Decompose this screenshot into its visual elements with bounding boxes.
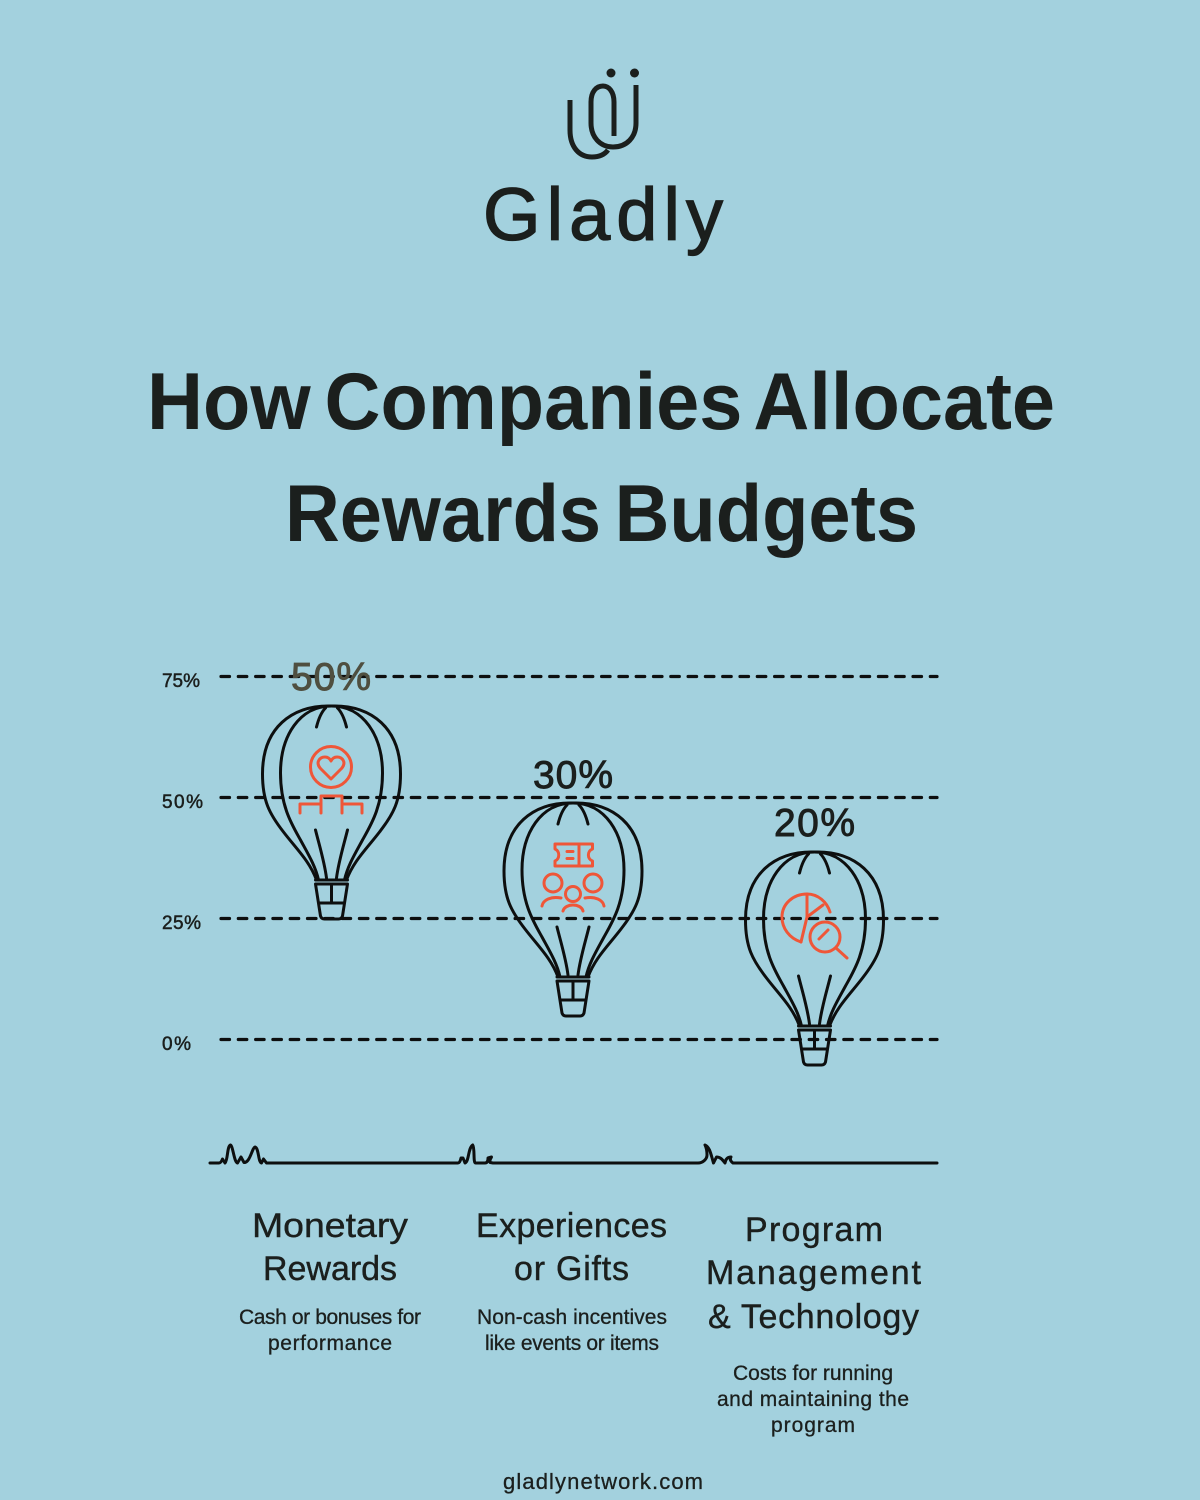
category: monetary rewards: performance xyxy=(268,1332,392,1355)
title: Rewards Budgets xyxy=(285,469,918,559)
category: monetary rewards: Cash or bonuses for xyxy=(239,1306,421,1329)
category: program management and technology: Costs for running xyxy=(733,1362,893,1385)
category: program management and technology xyxy=(706,1211,922,1437)
balloon: experiences or gifts 30% xyxy=(504,754,642,1016)
logo: Gladly xyxy=(483,68,723,256)
wordmark: Gladly xyxy=(483,173,723,256)
chart: balloon chart of budget allocation xyxy=(162,656,937,1065)
icon: pie chart and magnifier xyxy=(782,894,847,958)
footer url: gladlynetwork.com xyxy=(503,1469,703,1494)
title: How Companies Allocate xyxy=(147,357,1055,447)
value label 50%: 50% xyxy=(291,656,371,699)
y axis labels: 50% xyxy=(162,792,203,813)
category: experiences or gifts xyxy=(476,1207,667,1355)
category: program management and technology: Program xyxy=(745,1211,883,1249)
icon: paperclip smile xyxy=(570,68,639,157)
category: experiences or gifts: Non-cash incentives xyxy=(477,1306,667,1329)
category: experiences or gifts: like events or items xyxy=(485,1332,659,1355)
y axis labels xyxy=(162,671,203,1055)
balloon: program management and technology 20% xyxy=(746,802,884,1065)
category: program management and technology: Management xyxy=(706,1254,922,1292)
category: experiences or gifts: Experiences xyxy=(476,1207,667,1245)
category: program management and technology: & Technology xyxy=(708,1298,919,1336)
category: monetary rewards xyxy=(239,1207,421,1355)
value label 20%: 20% xyxy=(774,802,855,845)
category: program management and technology: and maintaining the xyxy=(717,1388,909,1411)
category: experiences or gifts: or Gifts xyxy=(514,1250,629,1288)
title xyxy=(147,357,1055,559)
icon: ticket and people xyxy=(542,844,604,911)
y axis labels: 25% xyxy=(162,913,201,934)
category: program management and technology: program xyxy=(771,1414,855,1437)
ground line with grass xyxy=(210,1145,937,1163)
category: monetary rewards: Rewards xyxy=(263,1250,397,1288)
category: monetary rewards: Monetary xyxy=(252,1207,408,1245)
icon: heart and podium xyxy=(300,746,362,813)
balloon: monetary rewards 50% xyxy=(262,656,400,919)
y axis labels: 0% xyxy=(162,1034,191,1055)
value label 30%: 30% xyxy=(533,754,613,797)
y axis labels: 75% xyxy=(162,671,200,692)
